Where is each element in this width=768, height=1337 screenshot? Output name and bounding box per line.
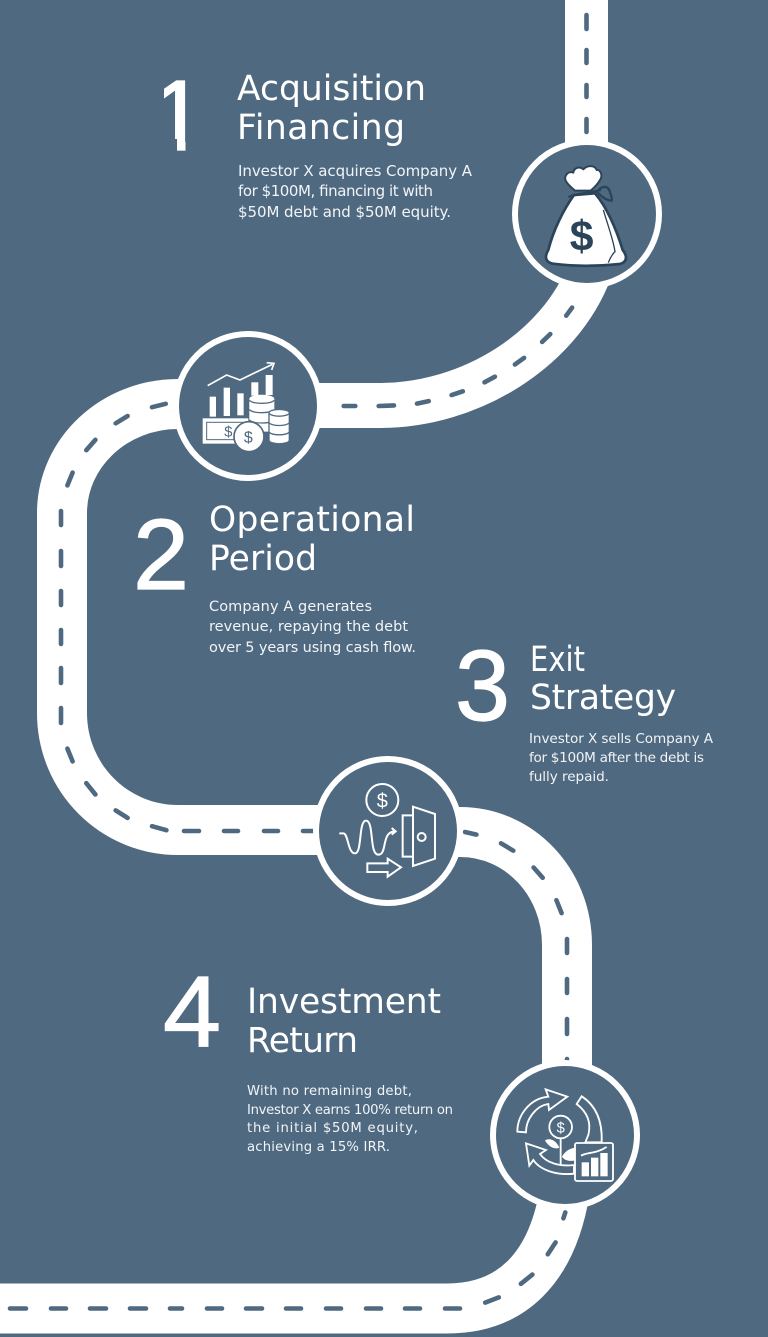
text: step 4 description: Investor X earns 100% return on (247, 1103, 453, 1118)
heading: Operational Period: Period (209, 539, 317, 579)
text: step 2 description: Company A generates (209, 599, 372, 615)
heading: Operational Period: Operational (209, 500, 415, 540)
heading: Investment Return: Investment (247, 982, 441, 1022)
text: step 2 description: over 5 years using cash flow. (209, 640, 416, 656)
number 4: 4 (163, 956, 221, 1068)
step 1 (164, 74, 472, 220)
text: step 3 description: Investor X sells Company A (529, 731, 714, 747)
heading: Investment Return: Return (247, 1021, 358, 1061)
heading: Acquisition Financing: Acquisition (237, 69, 426, 109)
heading: Exit Strategy: Strategy (530, 678, 676, 718)
text: step 1 description: for $100M, financing it with (238, 182, 433, 200)
number 1: 1 (150, 60, 206, 172)
text: step 1 description: Investor X acquires Company A (238, 162, 473, 180)
icon: growth cycle with plant and chart in circle (493, 1063, 637, 1207)
text: step 1 description: $50M debt and $50M equity. (238, 203, 451, 221)
icon: exit door and path in circle: $ (377, 790, 388, 812)
step 4 (163, 956, 453, 1155)
number 2: 2 (133, 499, 189, 611)
icon: growth chart and coins in circle: $ (224, 425, 232, 441)
text: step 4 description: achieving a 15% IRR. (247, 1140, 390, 1155)
icon: growth cycle with plant and chart in circle: $ (557, 1120, 565, 1136)
heading: Exit Strategy: Exit (530, 640, 585, 680)
step 3 (455, 630, 714, 785)
number 3: 3 (455, 630, 510, 742)
text: step 3 description: for $100M after the debt is (529, 750, 704, 766)
icon: exit door and path in circle (316, 759, 460, 903)
step 2 (133, 499, 416, 656)
text: step 4 description: With no remaining debt, (247, 1084, 412, 1099)
road (0, 0, 590, 1308)
icon: growth chart and coins in circle: $ (244, 429, 253, 446)
text: step 2 description: revenue, repaying the debt (209, 619, 408, 635)
icon: money bag in circle (515, 142, 659, 286)
icon: growth chart and coins in circle (176, 334, 320, 478)
text: step 3 description: fully repaid. (529, 769, 609, 785)
icon: money bag in circle: $ (570, 213, 594, 261)
heading: Acquisition Financing: Financing (237, 108, 405, 148)
text: step 4 description: the initial $50M equity, (247, 1121, 418, 1136)
